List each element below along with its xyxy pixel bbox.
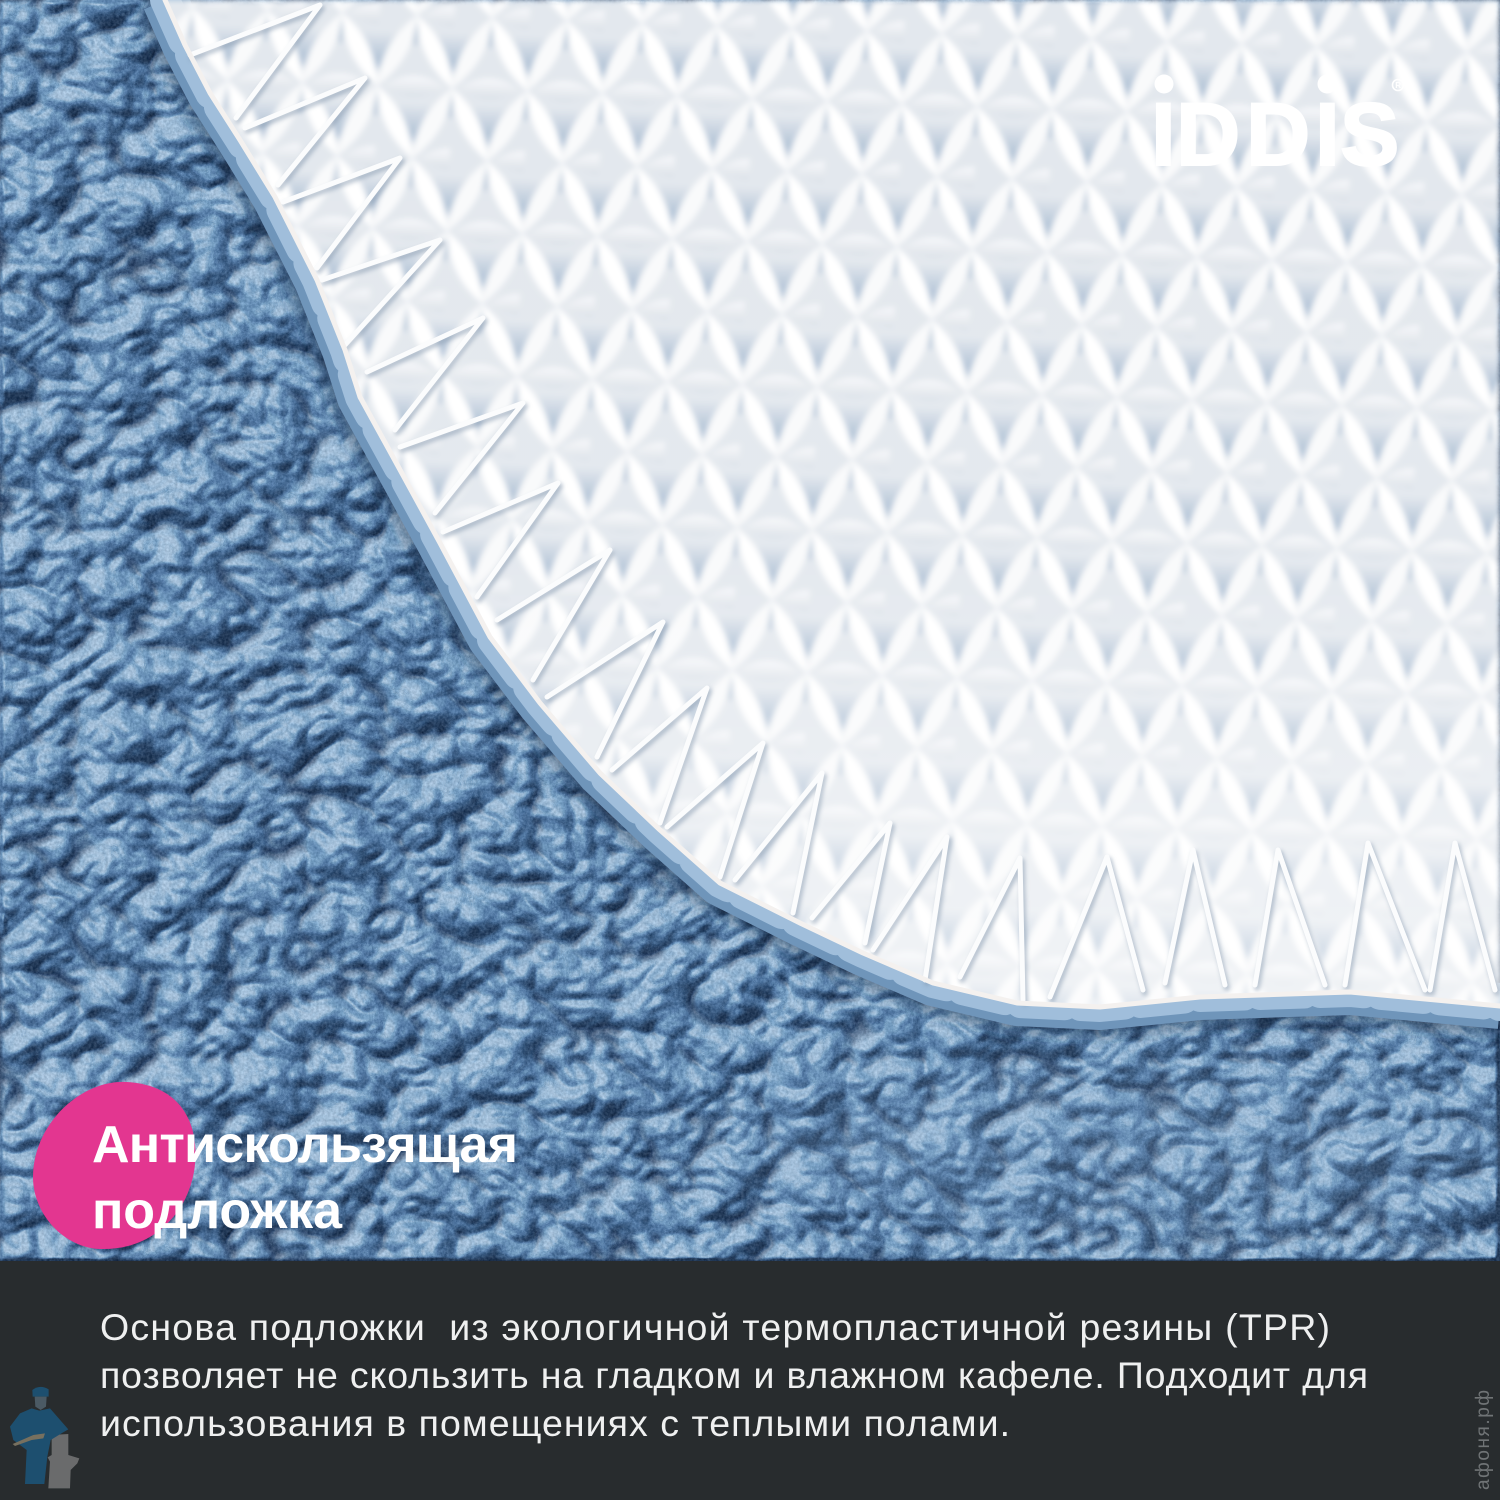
logo: IDDIS <box>1151 74 1404 184</box>
logo: IDDIS: D <box>1176 84 1240 184</box>
description text: Основа подложки из экологичной термопластичной резины (TPR) <box>100 1306 1330 1348</box>
site watermark: афоня.рф <box>1473 1390 1494 1490</box>
heading <box>92 1116 518 1240</box>
dark footer band <box>0 1261 1500 1500</box>
logo: IDDIS: S <box>1340 84 1399 184</box>
description text: позволяет не скользить на гладком и влажном кафеле. Подходит для <box>100 1354 1368 1396</box>
pad edge: blue binding ribbon <box>165 0 1500 1007</box>
heading: подложка <box>92 1182 343 1240</box>
icon: plumber mascot with toilet <box>10 1387 79 1488</box>
pink accent blob <box>33 1082 195 1249</box>
description text: использования в помещениях с теплыми полами. <box>100 1402 1010 1444</box>
logo: IDDIS: D <box>1246 84 1310 184</box>
white rubber backing pad <box>168 0 1500 1004</box>
description text <box>100 1306 1368 1444</box>
logo: IDDIS: I <box>1151 84 1176 184</box>
zigzag overlock stitching <box>165 0 1500 1007</box>
heading: Антискользящая <box>92 1116 518 1174</box>
logo: IDDIS: R <box>1395 81 1401 90</box>
logo: IDDIS: I <box>1315 84 1340 184</box>
